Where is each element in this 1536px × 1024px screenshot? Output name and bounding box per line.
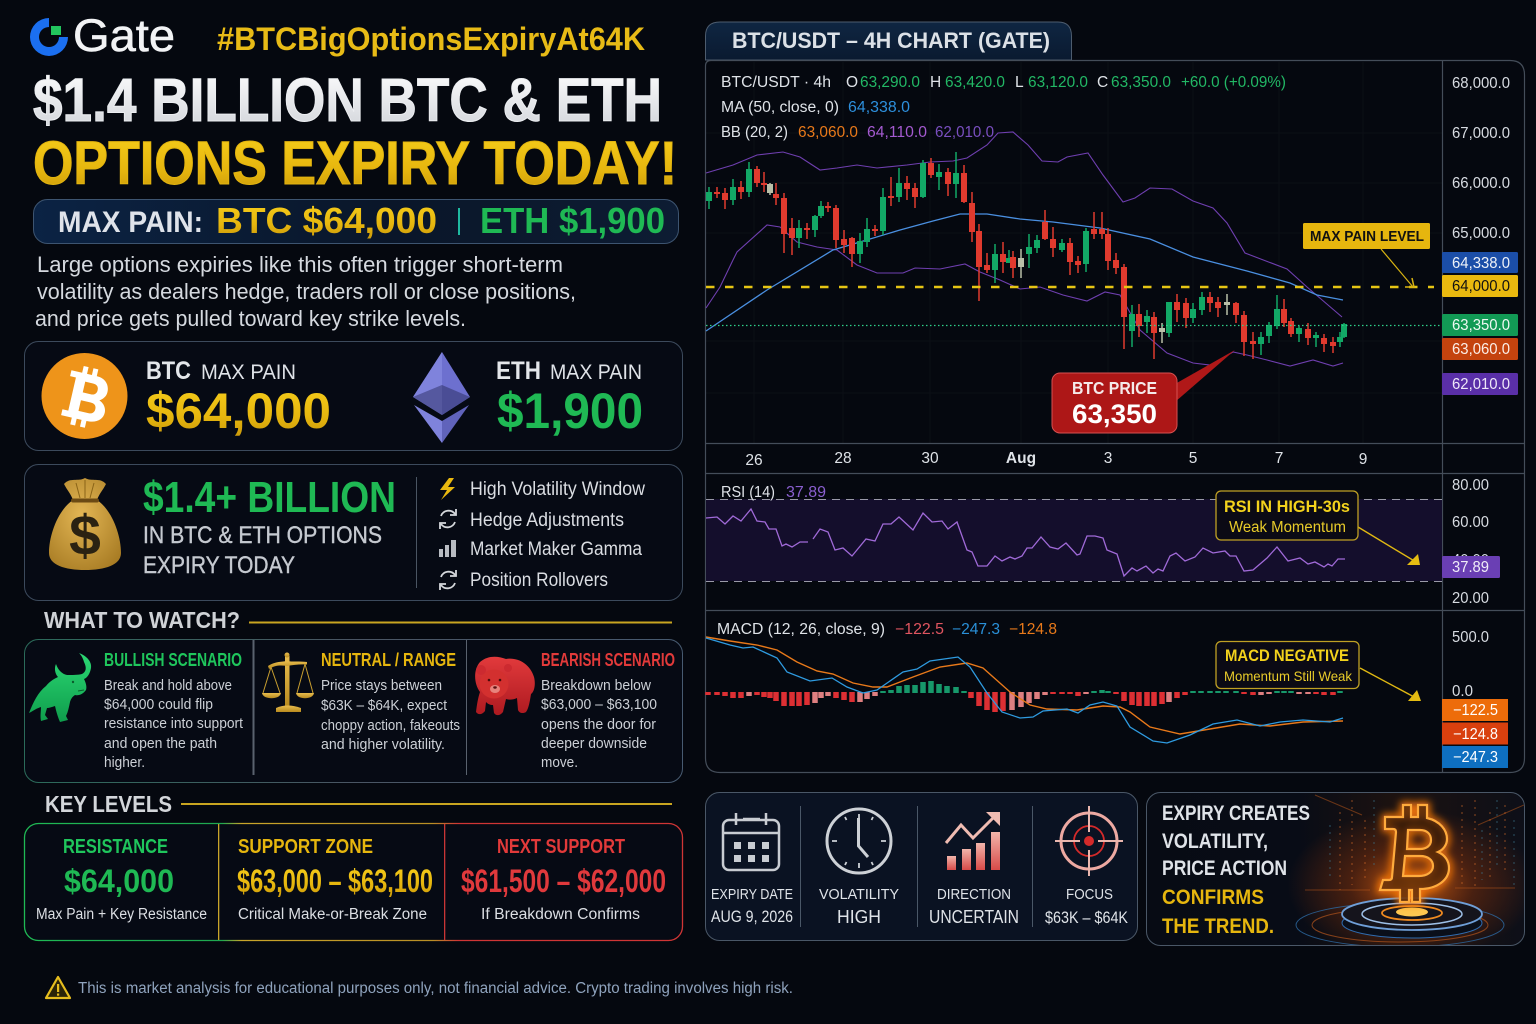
stat: direction	[929, 812, 1019, 927]
scenario: bullish: and open the path	[104, 736, 217, 752]
subheading	[143, 522, 382, 579]
price tags	[1442, 252, 1518, 395]
legend: moving average: 64,338.0	[848, 99, 910, 116]
RSI axis: 80.00	[1452, 477, 1489, 494]
logo: Gate	[30, 10, 175, 61]
callout: MACD: Momentum Still Weak	[1224, 668, 1353, 684]
MACD histogram	[708, 681, 1340, 712]
icon: warning	[46, 977, 70, 998]
takeaway text: PRICE ACTION	[1162, 857, 1287, 880]
stat: volatility: HIGH	[837, 907, 881, 927]
title: $1.4 BILLION BTC & ETH	[33, 66, 662, 134]
legend: OHLC: BTC/USDT · 4h	[721, 74, 831, 91]
legend: OHLC: C	[1097, 74, 1108, 91]
disclaimer	[46, 977, 793, 998]
scenario: neutral: and higher volatility.	[321, 737, 445, 753]
price tags: 62,010.0	[1452, 376, 1510, 393]
level: support zone	[237, 836, 433, 923]
icon: ethereum diamond	[413, 352, 470, 443]
max pain banner: ETH $1,900	[480, 200, 665, 241]
date axis: 3	[1104, 450, 1112, 467]
RSI axis: 20.00	[1452, 590, 1489, 607]
level: next support	[461, 836, 666, 923]
icon: balance scale	[262, 652, 314, 712]
panel: trading chart	[706, 60, 1524, 772]
RSI panel	[706, 477, 1500, 607]
MACD legend: −247.3	[952, 621, 1000, 638]
icon: Gate ring	[30, 18, 68, 56]
callout: RSI	[1216, 491, 1420, 565]
callout: max pain level	[1303, 223, 1430, 287]
stat: expiry date	[711, 813, 793, 926]
icon: hedge cycle	[440, 509, 456, 529]
panel: key levels	[24, 824, 682, 940]
scenario: bullish: Break and hold above	[104, 678, 232, 694]
MACD legend: −124.8	[1009, 621, 1057, 638]
legend: moving average: MA (50, close, 0)	[721, 99, 839, 116]
text: hedge: Hedge Adjustments	[470, 510, 624, 531]
icon: bull	[29, 653, 91, 722]
line: max pain level	[706, 286, 1434, 288]
RSI axis	[1452, 477, 1489, 607]
line: current price	[706, 324, 1442, 326]
price tags: 64,000.0	[1452, 278, 1510, 295]
price axis: 66,000.0	[1452, 175, 1510, 192]
date axis: 26	[745, 452, 763, 469]
panel: max pain cards	[24, 342, 682, 450]
ETH max pain label: ETH	[496, 357, 541, 385]
stat: direction: DIRECTION	[937, 886, 1011, 903]
MACD value tags	[1442, 699, 1508, 768]
scenario: bearish: deeper downside	[541, 736, 647, 752]
level: next support: $61,500 – $62,000	[461, 863, 666, 899]
MACD line	[706, 638, 1343, 743]
date axis: 7	[1275, 450, 1283, 467]
stat: expiry date: AUG 9, 2026	[711, 907, 793, 926]
hashtag: #BTCBigOptionsExpiryAt64K	[217, 21, 645, 57]
scenario: bearish: BEARISH SCENARIO	[541, 649, 675, 670]
MACD legend	[717, 621, 1057, 638]
legend: OHLC: 63,350.0	[1111, 74, 1171, 91]
icon: growth chart	[946, 812, 1000, 870]
RSI axis: 40.00	[1452, 552, 1489, 569]
MACD legend: MACD (12, 26, close, 9)	[717, 621, 885, 638]
icon: platform	[1296, 898, 1504, 947]
level: support zone: $63,000 – $63,100	[237, 863, 433, 899]
callout: BTC price: BTC PRICE	[1072, 378, 1157, 398]
icon: gamma bars	[439, 540, 456, 557]
legend: OHLC: L	[1015, 74, 1024, 91]
icon: bitcoin coin	[42, 353, 128, 439]
legend: bollinger bands: 63,060.0	[798, 124, 858, 141]
price tags: 63,350.0	[1452, 317, 1510, 334]
ETH max pain label	[496, 357, 642, 385]
max pain banner	[34, 200, 678, 244]
heading: key levels: KEY LEVELS	[45, 791, 172, 817]
callout: BTC price	[1052, 350, 1235, 433]
price axis: 67,000.0	[1452, 125, 1510, 142]
scenario: neutral: NEUTRAL / RANGE	[321, 649, 456, 670]
takeaway text	[1162, 802, 1310, 938]
MACD axis: 0.0	[1452, 683, 1473, 700]
scenario: bullish	[104, 649, 243, 771]
text: gamma: Market Maker Gamma	[470, 539, 642, 560]
stat: expiry date: EXPIRY DATE	[711, 886, 793, 903]
scenario: neutral: Price stays between	[321, 678, 442, 694]
level: resistance	[36, 836, 207, 923]
scenario: bullish: higher.	[104, 755, 145, 771]
legend: bollinger bands: 64,110.0	[867, 124, 927, 141]
MACD value tags: −247.3	[1453, 749, 1498, 766]
icon: lightning	[440, 478, 455, 500]
moving average line	[706, 214, 1343, 331]
RSI legend: 37.89	[786, 484, 826, 501]
BTC max pain label: BTC	[146, 357, 191, 385]
RSI legend: RSI (14)	[721, 484, 775, 501]
level: next support: If Breakdown Confirms	[481, 906, 640, 923]
date axis	[745, 450, 1367, 469]
legend: moving average	[721, 99, 910, 116]
BTC max pain label	[146, 357, 296, 385]
panel: bitcoin takeaway	[1146, 792, 1525, 946]
panel: scenarios	[24, 640, 682, 782]
panel: total notional	[24, 464, 682, 600]
callout: max pain level: MAX PAIN LEVEL	[1310, 228, 1424, 245]
date axis: 28	[834, 450, 852, 467]
BTC max pain label: MAX PAIN	[201, 361, 296, 384]
stat: focus: FOCUS	[1066, 886, 1113, 903]
level: resistance: Max Pain + Key Resistance	[36, 906, 207, 923]
MACD signal line	[706, 637, 1343, 734]
date axis: 30	[921, 450, 939, 467]
RSI value tag: 37.89	[1452, 559, 1489, 576]
price tags: 64,338.0	[1452, 255, 1510, 272]
takeaway text: VOLATILITY,	[1162, 830, 1268, 853]
subheading: IN BTC & ETH OPTIONS	[143, 522, 382, 549]
chart tab: BTC/USDT – 4H CHART (GATE)	[732, 28, 1050, 53]
wordmark: Gate	[73, 10, 175, 61]
callout: BTC price: 63,350	[1072, 399, 1157, 429]
icon: clock	[827, 809, 891, 873]
RSI value tag	[1442, 556, 1500, 578]
callout: MACD	[1216, 642, 1421, 701]
legend: OHLC: O	[846, 74, 858, 91]
scenario: bearish: move.	[541, 755, 578, 771]
price axis: 65,000.0	[1452, 225, 1510, 242]
scenario: bearish: Breakdown below	[541, 678, 651, 694]
scenario: bullish: BULLISH SCENARIO	[104, 649, 242, 670]
list: drivers	[439, 478, 645, 591]
title	[33, 66, 677, 197]
scenario: bullish: $64,000 could flip	[104, 697, 213, 713]
RSI axis: 60.00	[1452, 514, 1489, 531]
scenario: neutral: $63K – $64K, expect	[321, 698, 447, 714]
bollinger bands	[706, 132, 1343, 366]
chart tab	[706, 22, 1072, 60]
level: support zone: Critical Make-or-Break Zone	[238, 906, 427, 923]
intro paragraph: volatility as dealers hedge, traders roll or close positions,	[37, 279, 576, 304]
stat: focus: $63K – $64K	[1045, 908, 1129, 927]
RSI legend	[721, 484, 826, 501]
scenario: neutral: choppy action, fakeouts	[321, 718, 460, 734]
heading: what to watch: WHAT TO WATCH?	[44, 607, 240, 633]
stat: focus	[1045, 806, 1129, 927]
date axis: 9	[1359, 451, 1367, 468]
level: resistance: RESISTANCE	[63, 836, 168, 858]
MACD value tags: −124.8	[1453, 726, 1498, 743]
text: rollovers: Position Rollovers	[470, 570, 608, 591]
price axis: 68,000.0	[1452, 75, 1510, 92]
title: OPTIONS EXPIRY TODAY!	[33, 129, 677, 197]
stat: volatility	[819, 809, 899, 927]
legend: OHLC: 63,120.0	[1028, 74, 1088, 91]
scenario: bearish: $63,000 – $63,100	[541, 697, 657, 713]
text: This is market analysis for educational purposes only, not financial advice. Crypto trading involves high risk.	[78, 980, 793, 997]
legend: OHLC: 63,420.0	[945, 74, 1005, 91]
MACD panel	[706, 621, 1508, 768]
stat: direction: UNCERTAIN	[929, 907, 1019, 927]
icon: rollover cycle	[440, 570, 456, 590]
legend: OHLC	[721, 74, 1286, 91]
intro paragraph: Large options expiries like this often trigger short-term	[37, 252, 563, 277]
icon: money bag: $	[69, 504, 101, 568]
icon: neon bitcoin	[1380, 805, 1449, 902]
subheading: EXPIRY TODAY	[143, 552, 295, 579]
takeaway text: CONFIRMS	[1162, 886, 1264, 909]
level: next support: NEXT SUPPORT	[497, 836, 625, 858]
icon: calendar	[723, 813, 779, 870]
icon: bear	[475, 657, 535, 715]
level: resistance: $64,000	[64, 863, 174, 899]
level: support zone: SUPPORT ZONE	[238, 836, 373, 858]
date axis: Aug	[1006, 450, 1036, 467]
legend: bollinger bands: 62,010.0	[935, 124, 994, 141]
price axis	[1452, 75, 1510, 242]
stat: volatility: VOLATILITY	[819, 886, 899, 903]
legend: bollinger bands	[721, 124, 994, 141]
MACD axis: 500.0	[1452, 629, 1489, 646]
scenario: bearish: opens the door for	[541, 717, 656, 733]
candlesticks	[709, 152, 1344, 359]
intro paragraph	[35, 252, 576, 331]
MACD legend: −122.5	[895, 621, 944, 638]
MACD axis	[1452, 629, 1489, 700]
panel: summary stats	[706, 792, 1138, 940]
intro paragraph: and price gets pulled toward key strike levels.	[35, 306, 466, 331]
date axis: 5	[1189, 450, 1197, 467]
legend: OHLC: H	[930, 74, 941, 91]
ETH max pain value: $1,900	[497, 383, 643, 439]
callout: MACD: MACD NEGATIVE	[1225, 646, 1349, 665]
scenario: bullish: resistance into support	[104, 716, 243, 732]
headline value: $1.4+ BILLION	[143, 473, 396, 522]
MACD value tags: −122.5	[1453, 702, 1498, 719]
takeaway text: THE TREND.	[1162, 915, 1274, 938]
scenario: neutral	[321, 649, 460, 753]
icon: target	[1055, 806, 1123, 876]
scenario: bearish	[541, 649, 675, 771]
legend: bollinger bands: BB (20, 2)	[721, 124, 788, 141]
takeaway text: EXPIRY CREATES	[1162, 802, 1310, 825]
legend: OHLC: +60.0 (+0.09%)	[1181, 74, 1286, 91]
callout: RSI: RSI IN HIGH-30s	[1224, 497, 1350, 516]
max pain banner: MAX PAIN:	[58, 206, 203, 239]
price tags: 63,060.0	[1452, 341, 1510, 358]
BTC max pain value: $64,000	[146, 383, 331, 439]
max pain banner: BTC $64,000	[216, 200, 437, 241]
callout: RSI: Weak Momentum	[1229, 519, 1346, 536]
ETH max pain label: MAX PAIN	[550, 361, 642, 384]
text: high volatility: High Volatility Window	[470, 479, 645, 500]
icon: money bag	[49, 478, 121, 570]
RSI line	[706, 509, 1345, 576]
legend: OHLC: 63,290.0	[860, 74, 920, 91]
